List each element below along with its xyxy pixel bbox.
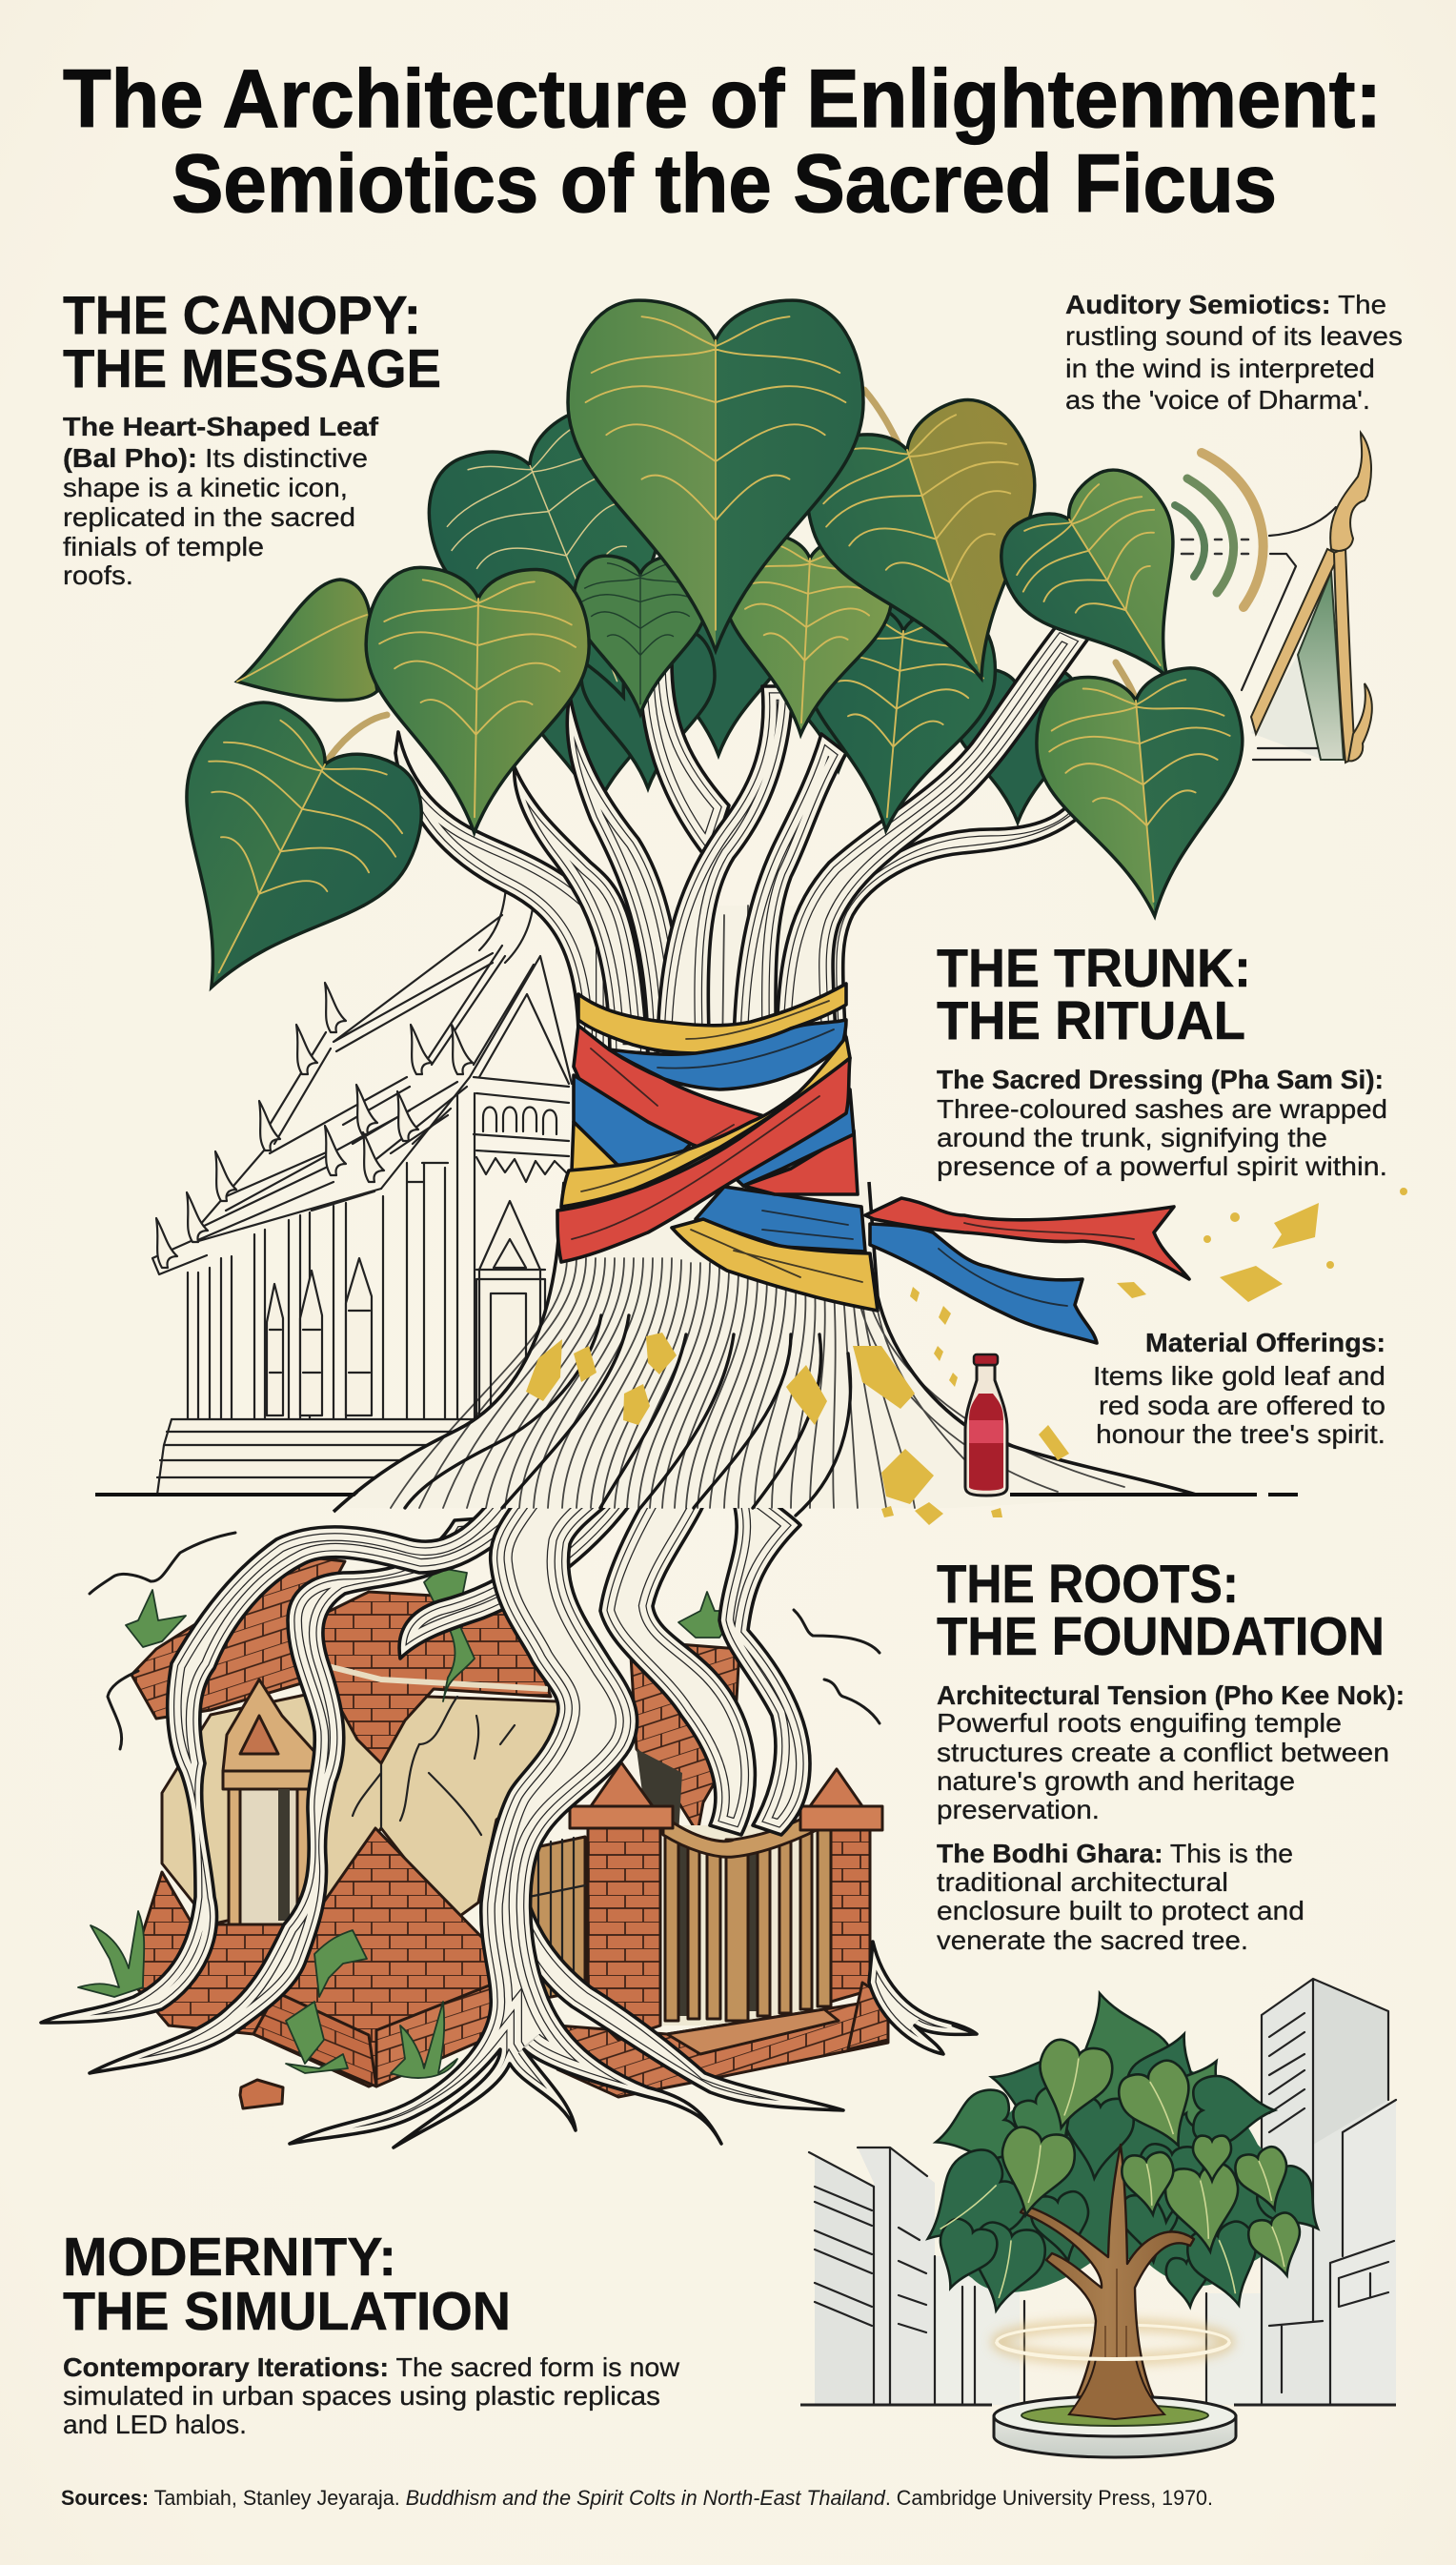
plaster walls [162,1693,563,1924]
root contour lines [405,1315,851,1516]
temple windows and door [267,1201,540,1420]
shrine door [223,1679,316,1771]
text: heart-shaped leaf: The Heart-Shaped Leaf [63,412,379,441]
halo front [997,2342,1229,2359]
back dark leaves [527,570,1082,823]
icon: temple roof finial [1242,433,1372,763]
temple gable and cornice [381,946,572,1189]
text: contemporary iterations: Contemporary Iterations: The sacred form is now [63,2352,680,2382]
text: heart-shaped leaf: roofs. [63,560,133,590]
ground line [95,1493,1298,1496]
left gate pillar [588,1828,660,2040]
text: architectural tension: Powerful roots enguifing temple [937,1708,1342,1738]
text: the bodhi ghara: enclosure built to protect and [937,1896,1304,1925]
trunk lower with flaring fibres [334,1182,1196,1516]
leaf: upper left dark [407,391,734,742]
gate base [557,1999,888,2097]
text: auditory semiotics: rustling sound of its leaves [1065,321,1403,351]
leaf: olive right [789,385,1090,714]
title [63,53,1382,230]
text: heart-shaped leaf: replicated in the sacred [63,502,355,532]
text: auditory semiotics [1065,290,1403,415]
text: sacred dressing: presence of a powerful spirit within. [937,1151,1387,1181]
city ground line [800,2404,1396,2406]
text: contemporary iterations: and LED halos. [63,2410,247,2439]
planter [994,2359,1236,2457]
leaf: small left [237,580,377,701]
heading: the roots [937,1554,1385,1667]
leaf: bottom right [1031,664,1257,925]
leaf: large top centre [568,300,863,650]
text: auditory semiotics: in the wind is interpreted [1065,354,1375,383]
heading: the roots: THE ROOTS: [937,1554,1239,1615]
light front leaves [990,2036,1311,2283]
leaf: centre right [717,532,895,739]
heading: the canopy: THE CANOPY: [63,285,421,346]
right wall brickwork [630,1640,739,1833]
icon: sound waves [1175,453,1264,607]
text: architectural tension: nature's growth and heritage [937,1766,1295,1796]
heading: modernity [63,2227,511,2342]
text: contemporary iterations [63,2352,680,2439]
leaf midribs [940,2058,1285,2298]
heading: the canopy [63,285,441,399]
temple line drawing [152,877,572,1495]
text: material offerings: Material Offerings: [1145,1328,1385,1357]
text: architectural tension: preservation. [937,1795,1100,1824]
tree upper trunk and branches [395,624,1088,1058]
tree trunk and branches [1021,2145,1194,2414]
text: sacred dressing: The Sacred Dressing (Pha Sam Si): [937,1065,1384,1094]
heading: the roots: THE FOUNDATION [937,1606,1385,1667]
modern city and simulated tree [800,1977,1396,2457]
text: architectural tension [937,1680,1405,1824]
three-coloured sashes [557,984,1189,1343]
lower plinth brickwork [131,1828,496,2087]
text: material offerings: red soda are offered to [1099,1391,1385,1420]
text: sacred dressing: Three-coloured sashes are wrapped [937,1094,1387,1124]
leaf: left middle [363,566,591,835]
text: architectural tension: Architectural Tension (Pho Kee Nok): [937,1680,1405,1710]
leaf: centre behind [574,556,707,714]
sash bands [696,1187,865,1252]
text: sacred dressing [937,1065,1387,1181]
text: material offerings: honour the tree's spirit. [1096,1419,1385,1449]
heading: the trunk [937,938,1251,1051]
text: the bodhi ghara: traditional architectural [937,1867,1228,1897]
halo back [997,2325,1229,2359]
canopy filler [947,2053,1291,2292]
trailing roots [41,1468,977,2148]
text: the bodhi ghara: The Bodhi Ghara: This is the [937,1839,1293,1868]
title: Semiotics of the Sacred Ficus [172,138,1277,230]
temple columns and walls [188,1093,475,1420]
text: heart-shaped leaf: (Bal Pho): Its distinctive [63,443,368,473]
plants and vines [78,1568,738,2078]
gold leaf offerings [526,1188,1407,1525]
heading: the trunk: THE TRUNK: [937,938,1251,999]
text: architectural tension: structures create a conflict between [937,1738,1389,1767]
leaf: right upper [982,453,1241,723]
leaf: lower right dark [791,597,1001,839]
text: heart-shaped leaf: finials of temple [63,532,264,561]
text: heart-shaped leaf: shape is a kinetic icon, [63,473,348,502]
city buildings [809,1979,1396,2405]
leaf stems [325,390,1136,764]
heading: the canopy: THE MESSAGE [63,338,441,399]
text: auditory semiotics: Auditory Semiotics: The [1065,290,1386,319]
icon: red soda bottle [965,1354,1007,1496]
temple main roof tiers [152,915,502,1274]
text: contemporary iterations: simulated in urban spaces using plastic replicas [63,2381,660,2411]
ground line right of trunk [1010,1493,1257,1496]
ruined brick shrine [78,1557,888,2108]
sources footnote: Sources: Tambiah, Stanley Jeyaraja. Buddhism and the Spirit Colts in North-East Thailand. Cambridge University Press, 1970. [61,2486,1213,2510]
heading: modernity: MODERNITY: [63,2227,396,2288]
canopy of heart shaped leaves [105,300,1257,1042]
gate [663,1802,831,2026]
text: material offerings: Items like gold leaf and [1093,1361,1385,1391]
text: the bodhi ghara: venerate the sacred tree. [937,1925,1248,1955]
wooden fence [527,1837,585,2002]
text: sacred dressing: around the trunk, signifying the [937,1123,1327,1152]
loose brick [240,2080,283,2108]
text: auditory semiotics: as the 'voice of Dharma'. [1065,385,1370,415]
heading: the trunk: THE RITUAL [937,990,1245,1051]
right gate pillar [831,1830,870,2002]
dark back leaves [901,1977,1339,2318]
upper left brickwork [131,1557,345,1719]
text: heart-shaped leaf [63,412,379,590]
title: The Architecture of Enlightenment: [63,53,1382,145]
leaf: bottom left large [105,682,446,1042]
heading: modernity: THE SIMULATION [63,2281,511,2342]
central cornice brickwork [314,1592,551,1763]
text: material offerings [1093,1328,1385,1449]
sash tails [865,1198,1189,1343]
temple base steps [157,1419,495,1495]
text: the bodhi ghara [937,1839,1304,1955]
